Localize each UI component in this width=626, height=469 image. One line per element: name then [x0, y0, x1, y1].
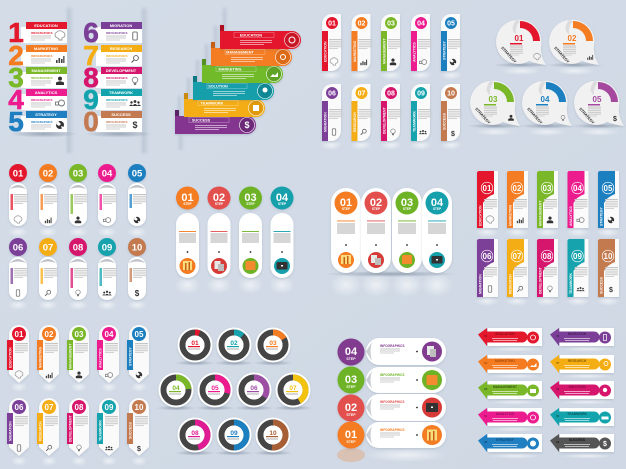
leaf card 06: 06 [328, 90, 336, 98]
ring 04 [158, 372, 194, 408]
pill 06 [9, 238, 27, 300]
flag card 04 [568, 171, 588, 228]
sticker 03 [470, 81, 520, 126]
strip 9: INFOGRAPHICS [106, 98, 128, 102]
arrow 05: 05 [484, 440, 488, 444]
horizontal step 02: STEP [346, 413, 356, 417]
strip 3: INFOGRAPHICS [31, 76, 53, 80]
capsule 02 [361, 188, 391, 273]
arrow 09: TEAMWORK [567, 412, 588, 416]
arrow 04 [478, 408, 542, 426]
pill 03 [69, 164, 87, 226]
panel: donut rings [156, 328, 313, 456]
sticker 03: STRATEGY [474, 107, 491, 125]
bookmark 10: $ [137, 446, 141, 453]
pill 10 [128, 238, 146, 300]
leaf card 08: DEVELOPMENT [382, 106, 386, 134]
flag card 01 [477, 171, 498, 228]
strip 6 [83, 17, 142, 48]
leaf card 01 [322, 14, 342, 71]
horizontal step 04 [338, 338, 446, 366]
ring 01 [178, 328, 212, 362]
strip 5: 5 [8, 106, 24, 137]
horizontal step 02: 02 [345, 402, 357, 414]
pill 01: 01 [13, 168, 24, 180]
flag card 10: $ [609, 287, 613, 294]
strip 6: MIGRATION [110, 23, 132, 28]
arrow 05 [478, 434, 542, 452]
strip 2 [8, 40, 67, 71]
ribbon: solution: SOLUTION [208, 84, 228, 88]
capsule 01 [331, 188, 361, 273]
flag card 01: 01 [483, 184, 492, 193]
strip 4: 4 [8, 84, 24, 115]
leaf card 10 [441, 84, 461, 141]
bookmark 01: 01 [15, 330, 24, 339]
strip 1: 1 [8, 17, 24, 48]
leaf card 05 [441, 14, 461, 71]
flag card 02: 02 [513, 184, 522, 193]
ribbon: management: MANAGEMENT [226, 50, 254, 54]
flag card 08: 08 [543, 252, 552, 261]
sticker 05: $ [613, 116, 617, 123]
strip 10 [83, 106, 142, 137]
leaf card 04: 04 [417, 20, 425, 28]
horizontal step 01: 01 [345, 429, 357, 441]
bookmark 01: EDUCATION [8, 347, 12, 368]
panel: four joined capsules [323, 188, 459, 297]
arrow 08: 08 [556, 387, 560, 391]
ring 06 [236, 372, 272, 408]
leaf card 01: 01 [328, 20, 336, 28]
leaf card 04: ANALYTICS [412, 42, 416, 62]
strip 8 [83, 62, 142, 93]
leaf card 06: MIGRATION [323, 112, 327, 132]
flag card 06: 06 [483, 252, 492, 261]
strip 1: INFOGRAPHICS [31, 31, 53, 35]
arrow 03 [478, 381, 542, 399]
bookmark 03: MANAGEMENT [68, 343, 72, 369]
panel: speech stickers [467, 20, 626, 136]
horizontal step 03: STEP [346, 385, 356, 389]
capsule 02: STEP [372, 207, 381, 211]
strip 1: EDUCATION [34, 23, 58, 28]
bookmark 04 [97, 325, 119, 383]
bookmark 06 [7, 398, 29, 456]
leaf card 09: TEAMWORK [412, 111, 416, 132]
bookmark 06: MIGRATION [8, 421, 12, 441]
flag card 02: MARKETING [508, 205, 512, 226]
strip 3: 3 [8, 62, 24, 93]
bookmark 07 [37, 398, 59, 456]
bookmark 03: 03 [75, 330, 84, 339]
panel: pills with number badges [8, 164, 147, 310]
arrow 06: MIGRATION [568, 332, 587, 336]
arrow 06: 06 [556, 334, 560, 338]
flag card 06: MIGRATION [478, 274, 482, 294]
flag card 03 [537, 171, 558, 228]
bookmark 02 [37, 325, 59, 383]
horizontal step 03: 03 [345, 374, 357, 386]
horizontal step 03: INFOGRAPHICS [380, 373, 404, 377]
leaf card 10: 10 [447, 90, 455, 98]
bookmark 07: RESEARCH [38, 421, 42, 441]
pill 05: 05 [132, 168, 143, 180]
ring 04: 04 [172, 385, 180, 392]
strip 10: 0 [83, 106, 99, 137]
pill 06: 06 [13, 242, 23, 254]
flag card 06 [477, 239, 498, 297]
strip 7 [83, 40, 142, 71]
panel: stair ribbons [175, 8, 301, 150]
ribbon: marketing: MARKETING [218, 68, 242, 72]
bookmark 08 [67, 398, 89, 456]
ring 08: 08 [191, 430, 199, 437]
flag card 10 [598, 239, 619, 297]
flag card 07: 07 [513, 252, 522, 261]
ring 03 [256, 328, 290, 362]
step pill 02: 02 [213, 192, 225, 204]
capsule 01: STEP [342, 207, 351, 211]
flag card 04: 04 [573, 184, 582, 193]
strip 2: MARKETING [34, 46, 58, 51]
pill 04 [98, 164, 116, 226]
sticker 05: STRATEGY [578, 107, 595, 125]
pill 08: 08 [73, 242, 83, 254]
ribbon: success: SUCCESS [192, 118, 211, 122]
sticker 05: 05 [593, 95, 602, 104]
leaf card 04 [411, 14, 431, 71]
flag card 09 [568, 239, 588, 297]
ribbon: management [211, 42, 292, 66]
pill 07: 07 [43, 242, 53, 254]
capsule 03: STEP [403, 207, 412, 211]
pill 03: 03 [73, 168, 83, 180]
step pill 04 [270, 186, 294, 278]
strip 7: INFOGRAPHICS [106, 54, 128, 58]
panel: horizontal step capsules [337, 338, 448, 462]
step pill 01: 01 [181, 192, 194, 204]
ring 01: 01 [191, 340, 199, 347]
leaf card 03: 03 [387, 20, 395, 28]
flag card 08: DEVELOPMENT [538, 266, 542, 294]
leaf card 10: SUCCESS [442, 112, 446, 130]
strip 4: ANALYTICS [35, 90, 58, 95]
arrow 06 [550, 328, 614, 346]
bookmark 06: 06 [15, 403, 24, 412]
arrow 07: RESEARCH [568, 359, 587, 363]
panel: numbered paper strips [8, 8, 153, 153]
arrow 04: 04 [484, 414, 488, 418]
leaf card 02: MARKETING [353, 41, 357, 62]
strip 7: RESEARCH [110, 46, 132, 51]
strip 10: SUCCESS [111, 112, 131, 117]
panel: leaf cards with side label [320, 14, 462, 150]
leaf card 03 [381, 14, 401, 71]
arrow 10: $ [603, 441, 607, 448]
leaf card 07 [352, 84, 372, 141]
sticker 01: STRATEGY [500, 46, 517, 64]
flag card 02 [507, 171, 528, 228]
flag card 03: MANAGEMENT [538, 200, 542, 226]
bookmark 10: SUCCESS [128, 421, 132, 439]
ring 03: 03 [269, 340, 277, 347]
capsule 04 [422, 188, 452, 273]
arrow 05: STRATEGY [496, 438, 515, 442]
horizontal step 02 [338, 394, 446, 422]
capsule 01: 01 [340, 197, 352, 209]
pill 02: 02 [43, 168, 53, 180]
step pill 03 [239, 186, 262, 278]
flag card 07 [507, 239, 528, 297]
flag card 07: RESEARCH [508, 274, 512, 294]
arrow 09 [550, 408, 614, 426]
step pill 04: 04 [276, 192, 289, 204]
leaf card 02 [352, 14, 372, 71]
pill 09 [98, 238, 116, 300]
ribbon: solution [193, 76, 274, 100]
bookmark 02: 02 [45, 330, 54, 339]
strip 5: STRATEGY [35, 112, 57, 117]
capsule 02: 02 [370, 197, 382, 209]
bookmark 09: 09 [105, 403, 114, 412]
bookmark 05 [127, 325, 149, 383]
ribbon: teamwork: TEAMWORK [201, 102, 224, 106]
panel: arrow labels [478, 328, 614, 458]
arrow 07 [550, 355, 614, 373]
pill 04: 04 [102, 168, 113, 180]
bookmark 04: ANALYTICS [98, 348, 102, 368]
bookmark 08: DEVELOPMENT [68, 414, 72, 442]
strip 5: INFOGRAPHICS [31, 120, 53, 124]
leaf card 08: 08 [387, 90, 395, 98]
strip 10: INFOGRAPHICS [106, 120, 128, 124]
pill 05 [128, 164, 146, 226]
step pill 03: 03 [244, 192, 257, 204]
bookmark 09: TEAMWORK [98, 420, 102, 441]
sticker 02: 02 [568, 34, 577, 43]
bookmark 02: MARKETING [38, 347, 42, 368]
bookmark 01 [7, 325, 29, 383]
leaf card 08 [381, 84, 401, 141]
sticker 01 [496, 20, 546, 65]
arrow 04: ANALYTICS [496, 412, 515, 416]
flag card 09: TEAMWORK [569, 273, 573, 294]
flag card 05: 05 [604, 184, 613, 193]
sticker 04 [522, 81, 572, 126]
horizontal step 01: STEP [346, 440, 356, 444]
bookmark 04: 04 [105, 330, 114, 339]
bookmark 05: 05 [135, 330, 144, 339]
capsule 04: STEP [433, 207, 442, 211]
leaf card 09: 09 [417, 90, 425, 98]
ring 07: 07 [289, 385, 297, 392]
arrow 01: EDUCATION [495, 332, 515, 336]
strip 9: 9 [83, 84, 99, 115]
leaf card 05: STRATEGY [442, 41, 446, 60]
leaf card 06 [322, 84, 342, 141]
sticker 04: STRATEGY [526, 107, 543, 125]
ring 05 [198, 372, 232, 408]
panel: pointed bookmark cards [7, 325, 149, 466]
horizontal step 03 [338, 366, 446, 394]
arrow 01 [478, 328, 542, 346]
ring 07 [276, 372, 310, 408]
arrow 02: 02 [484, 361, 488, 365]
flag card 10: SUCCESS [599, 276, 603, 294]
arrow 02: MARKETING [495, 359, 515, 363]
bookmark 10 [127, 398, 149, 456]
capsule 03 [392, 188, 422, 273]
arrow 10: 10 [556, 440, 560, 444]
strip 9 [83, 84, 142, 115]
horizontal step 04: 04 [345, 346, 358, 358]
strip 5 [8, 106, 67, 137]
horizontal step 04: STEP [346, 357, 356, 361]
strip 4: INFOGRAPHICS [31, 98, 53, 102]
strip 3: MANAGEMENT [31, 68, 61, 73]
flag card 05 [598, 171, 619, 228]
flag card 08 [537, 239, 558, 297]
strip 8: DEVELOPMENT [106, 68, 137, 73]
leaf card 03: MANAGEMENT [382, 38, 386, 64]
ring 02: 02 [230, 340, 238, 347]
strip 8: 8 [83, 62, 99, 93]
pill 10: $ [135, 289, 140, 298]
bookmark 10: 10 [135, 403, 144, 412]
ribbon: education [220, 25, 301, 49]
ring 10: 10 [269, 430, 277, 437]
panel: four step pills [174, 186, 295, 294]
bookmark 07: 07 [45, 403, 54, 412]
strip 9: TEAMWORK [109, 90, 133, 95]
leaf card 05: 05 [447, 20, 455, 28]
ring 08 [178, 418, 212, 452]
pill 10: 10 [132, 242, 142, 254]
sticker 02: STRATEGY [553, 46, 570, 64]
sticker 02 [549, 20, 599, 65]
arrow 09: 09 [556, 414, 560, 418]
leaf card 09 [411, 84, 431, 141]
arrow 01: 01 [484, 334, 488, 338]
step pill 01: STEP [183, 202, 193, 206]
strip 8: INFOGRAPHICS [106, 76, 128, 80]
step pill 03: STEP [246, 202, 256, 206]
arrow 03: MANAGEMENT [493, 385, 517, 389]
leaf card 07: 07 [358, 90, 365, 98]
strip 3 [8, 62, 67, 93]
step pill 02 [208, 186, 230, 278]
step pill 04: STEP [278, 202, 287, 206]
arrow 02 [478, 355, 542, 373]
horizontal step 01: INFOGRAPHICS [380, 428, 404, 432]
ring 02 [216, 328, 252, 362]
arrow 08 [550, 381, 614, 399]
panel: flag cards [475, 171, 620, 306]
ribbon: marketing [202, 59, 283, 83]
horizontal step 02: INFOGRAPHICS [380, 400, 404, 404]
ring 09 [216, 418, 252, 452]
pill 08 [69, 238, 87, 300]
flag card 04: ANALYTICS [569, 206, 573, 226]
strip 10: $ [132, 120, 138, 130]
sticker 03: 03 [489, 95, 498, 104]
capsule 04: 04 [431, 197, 444, 209]
arrow 08: SOLUTION [568, 385, 586, 389]
strip 7: 7 [83, 40, 99, 71]
flag card 05: STRATEGY [599, 207, 603, 226]
strip 6: 6 [83, 17, 99, 48]
ring 09: 09 [230, 430, 238, 437]
ribbon: teamwork [184, 93, 265, 117]
step pill 01 [176, 186, 199, 278]
flag card 01: EDUCATION [478, 205, 482, 226]
ribbon: success: $ [244, 120, 250, 130]
sticker 01: 01 [515, 34, 524, 43]
pill 07 [39, 238, 57, 300]
horizontal step 04: INFOGRAPHICS [380, 344, 404, 348]
horizontal step 01 [338, 422, 446, 448]
leaf card 10: $ [451, 131, 455, 138]
flag card 10: 10 [604, 252, 613, 261]
strip 6: INFOGRAPHICS [106, 31, 128, 35]
leaf card 02: 02 [358, 20, 365, 28]
sticker 05 [574, 81, 624, 126]
strip 1 [8, 17, 67, 48]
leaf card 07: RESEARCH [353, 112, 357, 132]
ribbon: success [175, 110, 256, 134]
arrow 03: 03 [484, 387, 488, 391]
leaf card 01: EDUCATION [323, 41, 327, 62]
bookmark 09 [97, 398, 119, 456]
pill 02 [39, 164, 57, 226]
flag card 09: 09 [573, 252, 582, 261]
ring 06: 06 [250, 385, 258, 392]
strip 4 [8, 84, 67, 115]
flag card 03: 03 [543, 184, 552, 193]
pill 01 [9, 164, 27, 226]
sticker 04: 04 [541, 95, 550, 104]
bookmark 08: 08 [75, 403, 84, 412]
step pill 02: STEP [215, 202, 224, 206]
bookmark 03 [67, 325, 89, 383]
ring 05: 05 [211, 385, 219, 392]
arrow 10 [550, 434, 614, 452]
arrow 07: 07 [556, 361, 560, 365]
ribbon: education: EDUCATION [240, 34, 262, 38]
arrow 10: SUCCESS [569, 438, 586, 442]
pill 09: 09 [102, 242, 112, 254]
strip 2: INFOGRAPHICS [31, 54, 53, 58]
bookmark 05: STRATEGY [128, 347, 132, 366]
capsule 03: 03 [401, 197, 413, 209]
strip 2: 2 [8, 40, 24, 71]
ring 10 [256, 418, 290, 452]
